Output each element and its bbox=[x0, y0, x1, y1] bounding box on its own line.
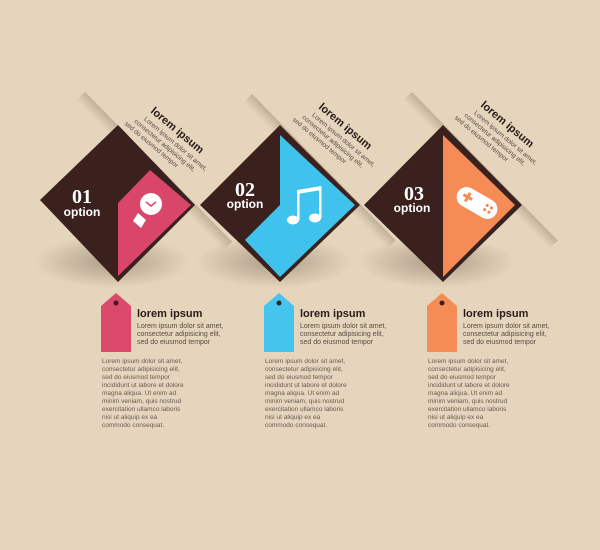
text block 3: minim veniam, quis nostrud bbox=[428, 398, 507, 405]
text block 3: sed do eiusmod tempor bbox=[463, 339, 536, 346]
text block 2: sed do eiusmod tempor bbox=[300, 339, 373, 346]
text block 2 bbox=[265, 308, 386, 429]
text block 1: commodo consequat. bbox=[102, 422, 164, 429]
text block 3 bbox=[428, 308, 549, 429]
option 2: consectetur adipisicing elit, bbox=[301, 114, 365, 170]
text block 1: magna aliqua. Ut enim ad bbox=[102, 390, 176, 397]
text block 1: exercitation ullamco laboris bbox=[102, 406, 180, 413]
icon: bulb bbox=[133, 193, 162, 228]
text block 3: incididunt ut labore et dolore bbox=[428, 382, 510, 389]
text block 1: Lorem ipsum dolor sit amet, bbox=[102, 358, 182, 365]
option 2: option bbox=[227, 197, 263, 211]
icon: music note bbox=[287, 186, 322, 224]
text block 1: lorem ipsum bbox=[137, 308, 202, 320]
text block 3: nisi ut aliquip ex ea bbox=[428, 414, 483, 421]
option 2: lorem ipsum bbox=[316, 101, 374, 152]
text block 1: consectetur adipisicing elit, bbox=[137, 331, 221, 338]
option 1: Lorem ipsum dolor sit amet, bbox=[142, 116, 208, 173]
option 1 bbox=[34, 92, 232, 288]
text block 2: consectetur adipisicing elit, bbox=[265, 366, 343, 373]
option 3: lorem ipsum bbox=[478, 99, 536, 150]
option 2: 02 bbox=[235, 179, 255, 201]
text block 1: minim veniam, quis nostrud bbox=[102, 398, 181, 405]
text block 2: incididunt ut labore et dolore bbox=[265, 382, 347, 389]
text block 1: sed do eiusmod tempor bbox=[137, 339, 210, 346]
text block 3: commodo consequat. bbox=[428, 422, 490, 429]
option 1: sed do eiusmod tempor bbox=[123, 120, 180, 170]
text block 2: Lorem ipsum dolor sit amet, bbox=[265, 358, 345, 365]
icon: gamepad bbox=[453, 183, 501, 223]
text block 1: nisi ut aliquip ex ea bbox=[102, 414, 157, 421]
text block 2: lorem ipsum bbox=[300, 308, 365, 320]
text block 3: sed do eiusmod tempor bbox=[428, 374, 496, 381]
option 1: lorem ipsum bbox=[148, 105, 206, 156]
text block 1: sed do eiusmod tempor bbox=[102, 374, 170, 381]
text block 2: exercitation ullamco laboris bbox=[265, 406, 343, 413]
tags bbox=[101, 293, 457, 352]
option 3 bbox=[359, 91, 558, 288]
option 1: consectetur adipisicing elit, bbox=[133, 118, 197, 174]
text block 2: consectetur adipisicing elit, bbox=[300, 331, 384, 338]
text block 3: lorem ipsum bbox=[463, 308, 528, 320]
text block 2: minim veniam, quis nostrud bbox=[265, 398, 344, 405]
option 2: sed do eiusmod tempor bbox=[291, 116, 348, 166]
text block 2: commodo consequat. bbox=[265, 422, 327, 429]
option 1: 01 bbox=[72, 186, 92, 208]
option 1: option bbox=[64, 205, 100, 219]
text block 1: consectetur adipisicing elit, bbox=[102, 366, 180, 373]
text block 2: magna aliqua. Ut enim ad bbox=[265, 390, 339, 397]
option 2 bbox=[196, 93, 396, 288]
text block 1: Lorem ipsum dolor sit amet, bbox=[137, 323, 223, 330]
option 3: consectetur adipisicing elit, bbox=[463, 112, 527, 168]
text block 3: consectetur adipisicing elit, bbox=[428, 366, 506, 373]
text block 2: nisi ut aliquip ex ea bbox=[265, 414, 320, 421]
text block 1 bbox=[102, 308, 223, 429]
option 3: 03 bbox=[404, 183, 424, 205]
option 3: option bbox=[394, 201, 430, 215]
text block 2: Lorem ipsum dolor sit amet, bbox=[300, 323, 386, 330]
text block 1: incididunt ut labore et dolore bbox=[102, 382, 184, 389]
text block 3: Lorem ipsum dolor sit amet, bbox=[463, 323, 549, 330]
option 3: sed do eiusmod tempor bbox=[453, 114, 510, 164]
text block 3: exercitation ullamco laboris bbox=[428, 406, 506, 413]
text block 3: magna aliqua. Ut enim ad bbox=[428, 390, 502, 397]
option 3: Lorem ipsum dolor sit amet, bbox=[472, 110, 538, 167]
text block 3: consectetur adipisicing elit, bbox=[463, 331, 547, 338]
text block 3: Lorem ipsum dolor sit amet, bbox=[428, 358, 508, 365]
text block 2: sed do eiusmod tempor bbox=[265, 374, 333, 381]
option 2: Lorem ipsum dolor sit amet, bbox=[310, 112, 376, 169]
